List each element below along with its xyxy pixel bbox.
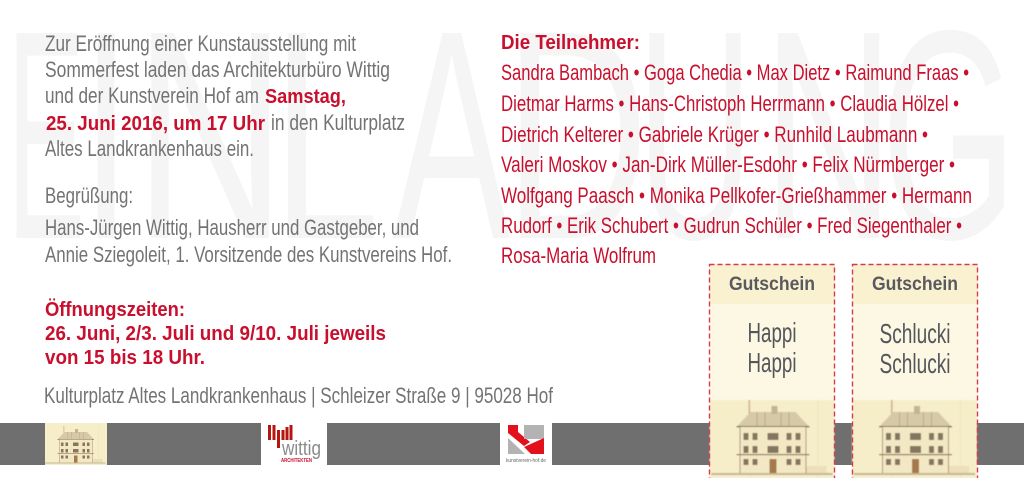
coupon: Happi Happi: Happi (748, 347, 796, 378)
grey footer bar (0, 423, 1024, 465)
greeting text block: Annie Sziegoleit, 1. Vorsitzende des Kunstvereins Hof. (45, 242, 452, 267)
coupon: Schlucki Schlucki: Gutschein (872, 274, 958, 295)
address line: Kulturplatz Altes Landkrankenhaus | Schleizer Straße 9 | 95028 Hof (44, 383, 554, 408)
logo: wittig architekten: wittig (281, 438, 321, 460)
intro text block: Samstag, (265, 85, 346, 108)
intro text block (45, 31, 405, 161)
greeting text block (45, 183, 452, 267)
intro text block: in den Kulturplatz (271, 110, 405, 135)
coupon: Schlucki Schlucki (852, 264, 978, 478)
coupon: Schlucki Schlucki: Schlucki (880, 348, 950, 379)
thumbnail: house image (45, 423, 107, 465)
participants list (501, 60, 972, 268)
coupon: Happi Happi: Happi (748, 317, 796, 348)
opening hours (45, 298, 386, 369)
greeting text block: Hans-Jürgen Wittig, Hausherr und Gastgeber, und (45, 215, 419, 240)
coupon: Happi Happi (709, 264, 835, 478)
logo: wittig architekten: ARCHITEKTEN (281, 458, 312, 464)
intro text block: 25. Juni 2016, um 17 Uhr (46, 112, 265, 135)
opening hours: 26. Juni, 2/3. Juli und 9/10. Juli jeweils (45, 322, 386, 345)
background word EINLADUNG (7, 0, 1017, 302)
participants heading: Die Teilnehmer: (501, 31, 640, 54)
logo: kunstverein hof (500, 421, 552, 467)
intro text block: Sommerfest laden das Architekturbüro Wittig (45, 57, 390, 82)
logo: kunstverein hof: kunstverein-hof.de (506, 458, 546, 464)
participants list: Rosa-Maria Wolfrum (501, 243, 656, 268)
greeting text block: Begrüßung: (45, 183, 133, 208)
opening hours: Öffnungszeiten: (45, 298, 185, 321)
intro text block: Altes Landkrankenhaus ein. (45, 136, 254, 161)
intro text block: Zur Eröffnung einer Kunstausstellung mit (45, 31, 357, 56)
opening hours: von 15 bis 18 Uhr. (45, 346, 205, 369)
coupon: Happi Happi: Gutschein (729, 274, 815, 295)
intro text block: und der Kunstverein Hof am (45, 83, 259, 108)
logo: wittig architekten (261, 421, 327, 467)
coupon: Schlucki Schlucki: Schlucki (880, 318, 950, 349)
